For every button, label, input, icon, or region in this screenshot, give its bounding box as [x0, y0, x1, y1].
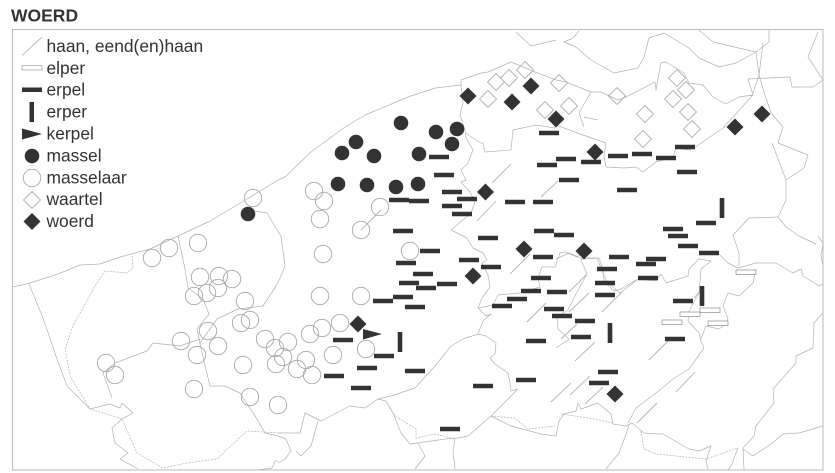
- symbols: masselaar open circles: [97, 182, 419, 414]
- legend item: erper: [30, 102, 87, 122]
- legend item: massel: massel: [46, 145, 102, 165]
- legend item: woerd: [24, 211, 94, 231]
- legend item: kerpel: [22, 124, 94, 144]
- legend item: waartel: waartel: [46, 189, 103, 209]
- legend item: elper: [22, 58, 85, 78]
- symbols: woerd filled diamonds: [350, 78, 770, 402]
- symbols: haan, eend(en)haan lines: [361, 164, 700, 423]
- symbols: erper vertical bars: [400, 198, 722, 352]
- symbols: waartel open diamonds: [480, 62, 700, 148]
- legend item: elper: elper: [46, 58, 85, 78]
- legend item: erpel: [22, 80, 85, 100]
- legend item: masselaar: masselaar: [46, 167, 127, 187]
- legend item: haan, eend(en)haan: haan, eend(en)haan: [46, 36, 203, 56]
- legend item: erpel: erpel: [46, 80, 85, 100]
- symbol: kerpel triangle: [363, 329, 382, 340]
- legend: [22, 36, 203, 231]
- legend item: woerd: woerd: [46, 211, 94, 231]
- legend item: kerpel: kerpel: [46, 124, 94, 144]
- legend item: erper: erper: [46, 102, 87, 122]
- symbols: massel filled circles: [241, 116, 464, 221]
- title: WOERD: [11, 6, 78, 26]
- symbols: erpel horizontal bars: [324, 133, 719, 429]
- symbols: elper open bars: [662, 270, 756, 326]
